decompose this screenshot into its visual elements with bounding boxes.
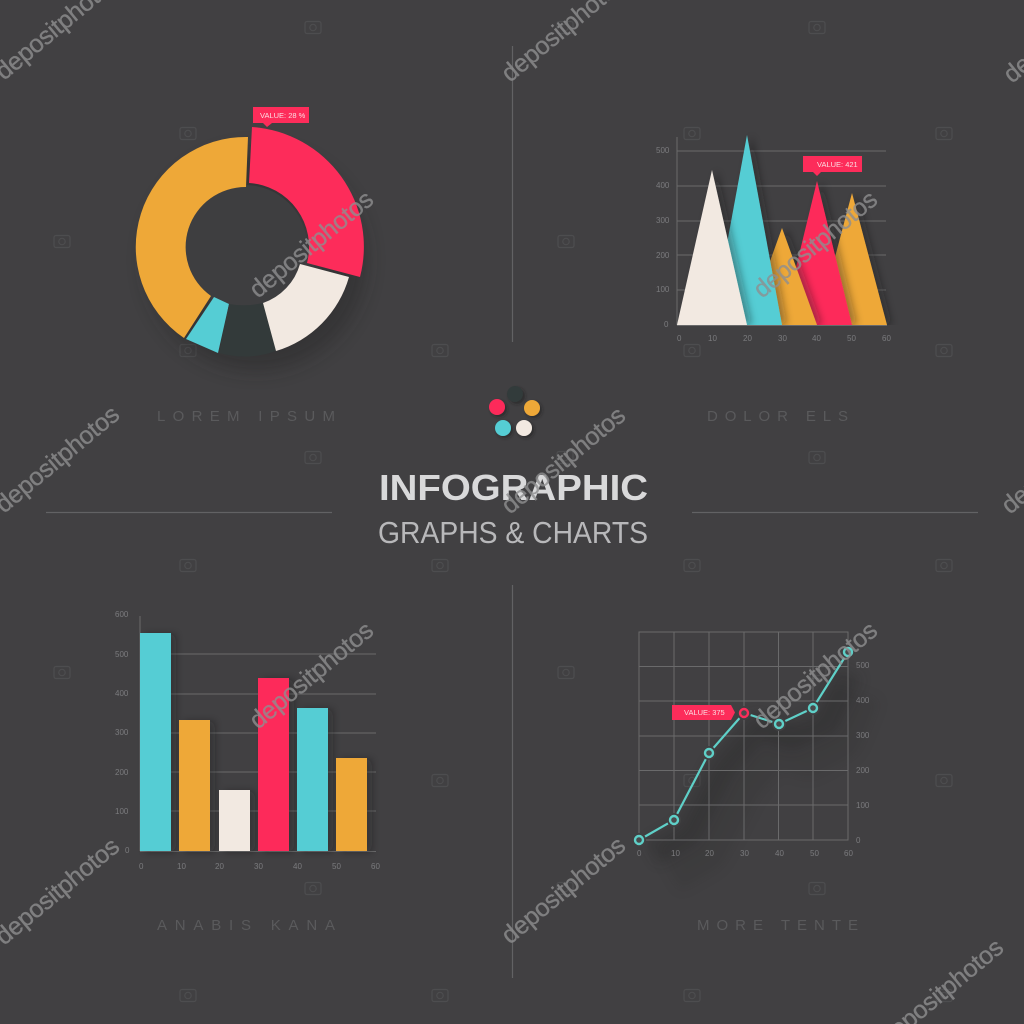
axis labels: 0	[664, 320, 669, 329]
panel: triangle chart	[656, 135, 891, 343]
axis labels: 20	[743, 334, 752, 343]
caption: lorem ipsum: LOREM IPSUM	[157, 408, 335, 425]
triangle orange 2	[817, 193, 887, 325]
axis labels: 500	[656, 146, 670, 155]
axis labels: 0	[856, 836, 861, 845]
title: INFOGRAPHIC	[379, 467, 648, 508]
watermarks: depositphotos	[244, 616, 379, 735]
axis labels: 100	[856, 801, 870, 810]
axis labels: 400	[856, 696, 870, 705]
panel: bar chart	[115, 610, 380, 871]
tag: value 421: VALUE: 421	[817, 160, 858, 169]
tag: value 375	[672, 705, 735, 720]
long shadow	[652, 672, 856, 869]
axis labels: 400	[656, 181, 670, 190]
axis labels: 300	[856, 731, 870, 740]
axis labels: 20	[705, 849, 714, 858]
donut segment: red	[249, 127, 364, 277]
watermarks: depositphotos	[748, 185, 883, 304]
axis labels: 600	[115, 610, 129, 619]
watermarks: depositphotos	[748, 616, 883, 735]
axis labels: 0	[677, 334, 682, 343]
tag: value 28	[253, 107, 309, 127]
watermarks: depositphotos	[496, 831, 631, 950]
axis labels: 300	[115, 728, 129, 737]
axis labels: 10	[708, 334, 717, 343]
axis labels: 50	[847, 334, 856, 343]
axis labels: 100	[115, 807, 129, 816]
point gaps	[632, 645, 855, 847]
axis labels: 200	[115, 768, 129, 777]
donut segment: cream	[263, 264, 349, 351]
panel: line chart	[632, 632, 870, 869]
data line	[639, 652, 848, 840]
watermarks: depositphotos	[244, 185, 379, 304]
axis labels: 30	[740, 849, 749, 858]
axis labels: 500	[856, 661, 870, 670]
donut segment: dark	[219, 303, 276, 357]
subtitle: GRAPHS & CHARTS	[378, 515, 648, 550]
bars	[140, 633, 367, 851]
donut segment: teal	[186, 297, 229, 353]
axis labels: 60	[371, 862, 380, 871]
axis labels: 40	[775, 849, 784, 858]
axis labels: 500	[115, 650, 129, 659]
axis labels: 30	[254, 862, 263, 871]
axis labels: 30	[778, 334, 787, 343]
watermarks: depositphotos	[496, 401, 631, 520]
axis labels	[656, 146, 891, 343]
axis labels: 10	[177, 862, 186, 871]
axis labels: 0	[637, 849, 642, 858]
grid	[639, 632, 848, 840]
tag: value 375: VALUE: 375	[684, 708, 725, 717]
axis labels: 200	[656, 251, 670, 260]
tag: value 28: VALUE: 28 %	[260, 111, 306, 120]
caption: more tente: MORE TENTE	[697, 917, 858, 934]
axis labels: 0	[139, 862, 144, 871]
axis labels: 20	[215, 862, 224, 871]
caption: anabis kana: ANABIS KANA	[157, 917, 335, 934]
axis labels: 50	[332, 862, 341, 871]
donut segment: orange	[136, 137, 248, 338]
axis labels: 400	[115, 689, 129, 698]
axis labels: 50	[810, 849, 819, 858]
triangle teal	[712, 135, 782, 325]
axis labels	[637, 661, 870, 858]
axis labels: 40	[293, 862, 302, 871]
logo dots	[489, 386, 540, 436]
axis labels: 200	[856, 766, 870, 775]
triangle orange 1	[747, 228, 817, 325]
axis labels: 100	[656, 285, 670, 294]
axis labels: 300	[656, 216, 670, 225]
grid lines	[677, 137, 887, 326]
tag: value 421	[803, 156, 862, 176]
grid lines	[140, 616, 376, 852]
panel: donut chart	[136, 107, 364, 357]
caption: dolor els: DOLOR ELS	[707, 408, 848, 425]
triangle cream	[677, 170, 747, 325]
axis labels: 60	[844, 849, 853, 858]
axis labels: 10	[671, 849, 680, 858]
data points	[635, 648, 852, 844]
triangle red	[782, 181, 852, 325]
axis labels: 0	[125, 846, 130, 855]
axis labels: 60	[882, 334, 891, 343]
axis labels	[115, 610, 380, 871]
axis labels: 40	[812, 334, 821, 343]
